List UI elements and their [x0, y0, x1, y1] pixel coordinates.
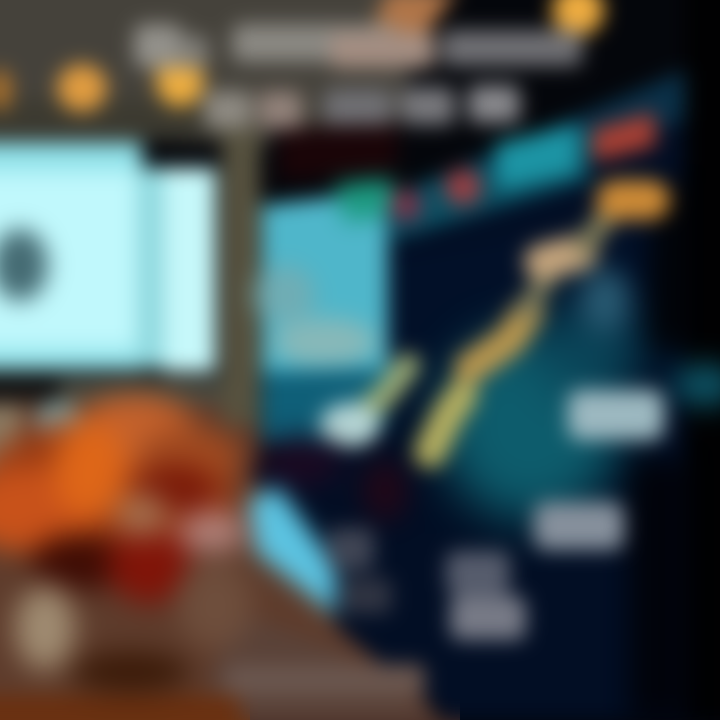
pale chart highlight: [320, 403, 380, 447]
flower vase: [15, 561, 253, 692]
header tiles: [391, 112, 656, 221]
rising line chart: [350, 200, 650, 452]
right dark edge: [685, 0, 720, 720]
bottom edge base colours: [0, 640, 720, 720]
lower left cyan panel: [248, 486, 336, 616]
pillar: [222, 130, 260, 425]
dark maroon header band: [278, 124, 400, 180]
blue glow spot: [581, 268, 629, 332]
left wall screen: [0, 142, 216, 372]
centre screen: [255, 178, 395, 445]
right chart wall: [250, 70, 688, 720]
orange flower arrangement: [0, 394, 246, 603]
maroon stat marker: [258, 436, 409, 522]
title blocks (illegible in reference): [134, 24, 582, 129]
ceiling lights: [0, 0, 720, 112]
screen chart spot: [0, 229, 48, 301]
caption block (illegible in reference): [225, 664, 425, 696]
stat blocks (illegible in reference): [328, 390, 664, 640]
